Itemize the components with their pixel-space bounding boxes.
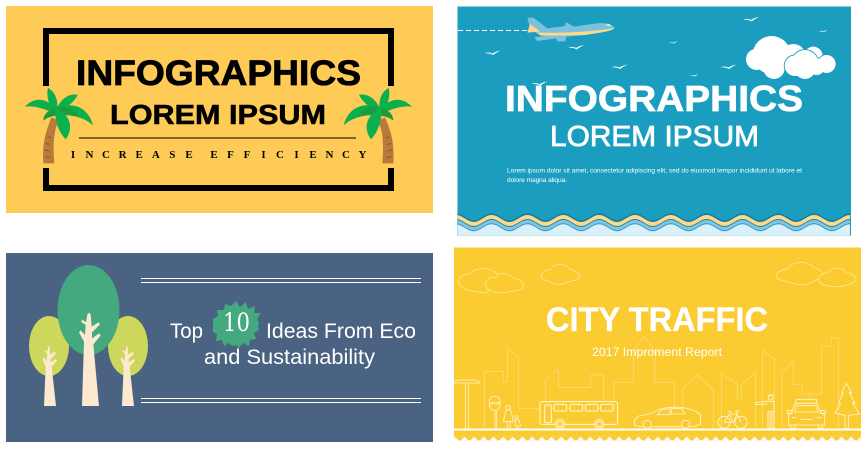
icon: birds	[484, 17, 828, 86]
icon: plane	[527, 18, 615, 41]
panel: blue sky banner	[457, 6, 851, 236]
paragraph: dolore magna aliqua.	[507, 177, 567, 184]
decorative rules	[141, 278, 421, 402]
icon: bicycle	[718, 411, 747, 428]
city skyline	[484, 336, 839, 428]
icon: street lamp	[455, 380, 479, 428]
divider line	[79, 138, 356, 139]
subtitle: 2017 Improment Report	[592, 345, 723, 359]
paragraph	[507, 168, 802, 184]
icon: left palm tree	[25, 88, 93, 163]
road	[454, 428, 861, 430]
heading line two: and Sustainability	[204, 345, 375, 369]
subheading: lorem ipsum: LOREM IPSUM	[550, 121, 759, 153]
black frame	[46, 31, 391, 188]
flight path	[458, 30, 530, 32]
tagline: INCREASE EFFICIENCY	[71, 149, 367, 161]
clouds	[458, 262, 856, 293]
heading: infographics: INFOGRAPHICS	[505, 78, 803, 119]
panel: eco banner	[6, 253, 433, 442]
panel: city traffic banner	[454, 248, 861, 441]
icon: stop sign	[489, 397, 501, 428]
icon: trees	[29, 265, 148, 406]
icon: right palm tree	[344, 88, 412, 163]
icon: pine tree	[835, 383, 859, 428]
subheading: lorem ipsum: LOREM IPSUM	[110, 99, 326, 130]
icon: traffic officer	[756, 395, 774, 428]
heading line one	[170, 319, 416, 343]
icon: green starburst badge	[213, 301, 261, 348]
panel: palm tree banner	[6, 6, 433, 213]
icon: pedestrians	[503, 405, 521, 429]
paragraph: Lorem ipsum dolor sit amet, consectetur adipiscing elit, sed do eiusmod tempor incididunt ut labore et	[507, 168, 802, 174]
icon: stop sign: STOP	[491, 402, 501, 406]
icon: bus	[540, 402, 618, 429]
badge number: 10	[223, 308, 250, 337]
heading: infographics: INFOGRAPHICS	[76, 54, 361, 93]
icon: car	[634, 407, 701, 428]
waves	[457, 213, 850, 236]
zigzag edge	[454, 437, 861, 441]
icon: clouds	[746, 36, 836, 79]
icon: police car	[787, 399, 826, 428]
heading line one: Ideas From Eco	[266, 319, 416, 343]
heading: city traffic: CITY TRAFFIC	[546, 301, 768, 339]
heading line one: Top	[170, 319, 203, 343]
